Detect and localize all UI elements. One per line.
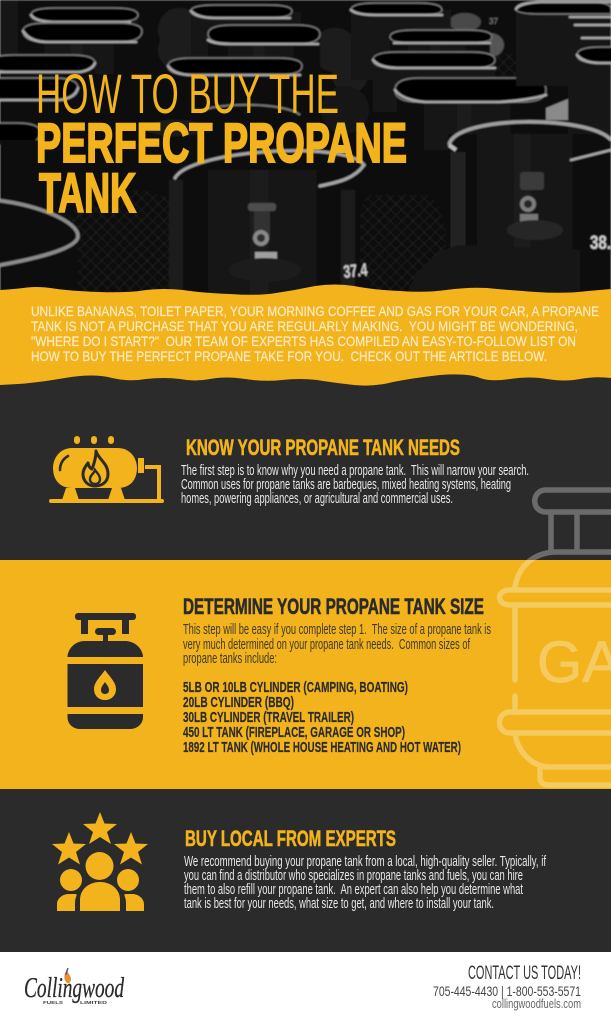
- title: HOW TO BUY THE: [36, 62, 339, 125]
- panel: intro wavy yellow band: [0, 284, 611, 386]
- icon: gas cylinder with drop: [68, 613, 143, 729]
- panel: hero photo of propane tanks: [0, 0, 611, 310]
- intro text: [31, 303, 599, 364]
- panel: step 3 buy local: [52, 812, 547, 912]
- contact details: [433, 963, 581, 1011]
- title: PERFECT PROPANE: [36, 111, 407, 174]
- list: tank sizes: 450 LT TANK (FIREPLACE, GARAGE OR SHOP): [183, 724, 405, 741]
- title: TANK: [39, 161, 136, 224]
- body text: step 1: homes, powering appliances, or agricultural and commercial uses.: [181, 491, 453, 507]
- heading: determine your propane tank size: DETERMINE YOUR PROPANE TANK SIZE: [183, 594, 484, 619]
- panel: step 2 determine tank size: [68, 594, 491, 756]
- panel: section backgrounds: [0, 370, 611, 1024]
- body text: step 1: [181, 463, 529, 507]
- list: tank sizes: 5LB OR 10LB CYLINDER (CAMPING, BOATING): [183, 679, 408, 696]
- list: tank sizes: 1892 LT TANK (WHOLE HOUSE HEATING AND HOT WATER): [183, 739, 461, 756]
- body text: step 3: [184, 854, 547, 912]
- panel: step 1 know your needs: [49, 435, 529, 507]
- list: tank sizes: [183, 679, 461, 756]
- heading: buy local from experts: BUY LOCAL FROM EXPERTS: [185, 826, 396, 851]
- icon: propane storage tank with flame: [49, 436, 164, 503]
- panel: hero photo of propane tanks: 37.4: [342, 260, 368, 282]
- logo: Collingwood Fuels Limited: Collingwood: [24, 972, 124, 1004]
- title: [36, 62, 407, 224]
- body text: step 2: [183, 622, 491, 667]
- logo: Collingwood Fuels Limited: [24, 968, 124, 1005]
- logo: Collingwood Fuels Limited: FUELS: [43, 1000, 63, 1005]
- icon: three stars above three people: [52, 812, 148, 911]
- list: tank sizes: 30LB CYLINDER (TRAVEL TRAILER): [183, 709, 354, 726]
- panel: hero photo of propane tanks: 37: [489, 17, 498, 26]
- watermark: large gas tank outline: [500, 490, 611, 785]
- heading: know your propane tank needs: KNOW YOUR PROPANE TANK NEEDS: [186, 435, 460, 460]
- list: tank sizes: 20LB CYLINDER (BBQ): [183, 694, 294, 711]
- body text: step 2: propane tanks include:: [183, 651, 277, 667]
- logo: Collingwood Fuels Limited: LIMITED: [80, 1000, 108, 1005]
